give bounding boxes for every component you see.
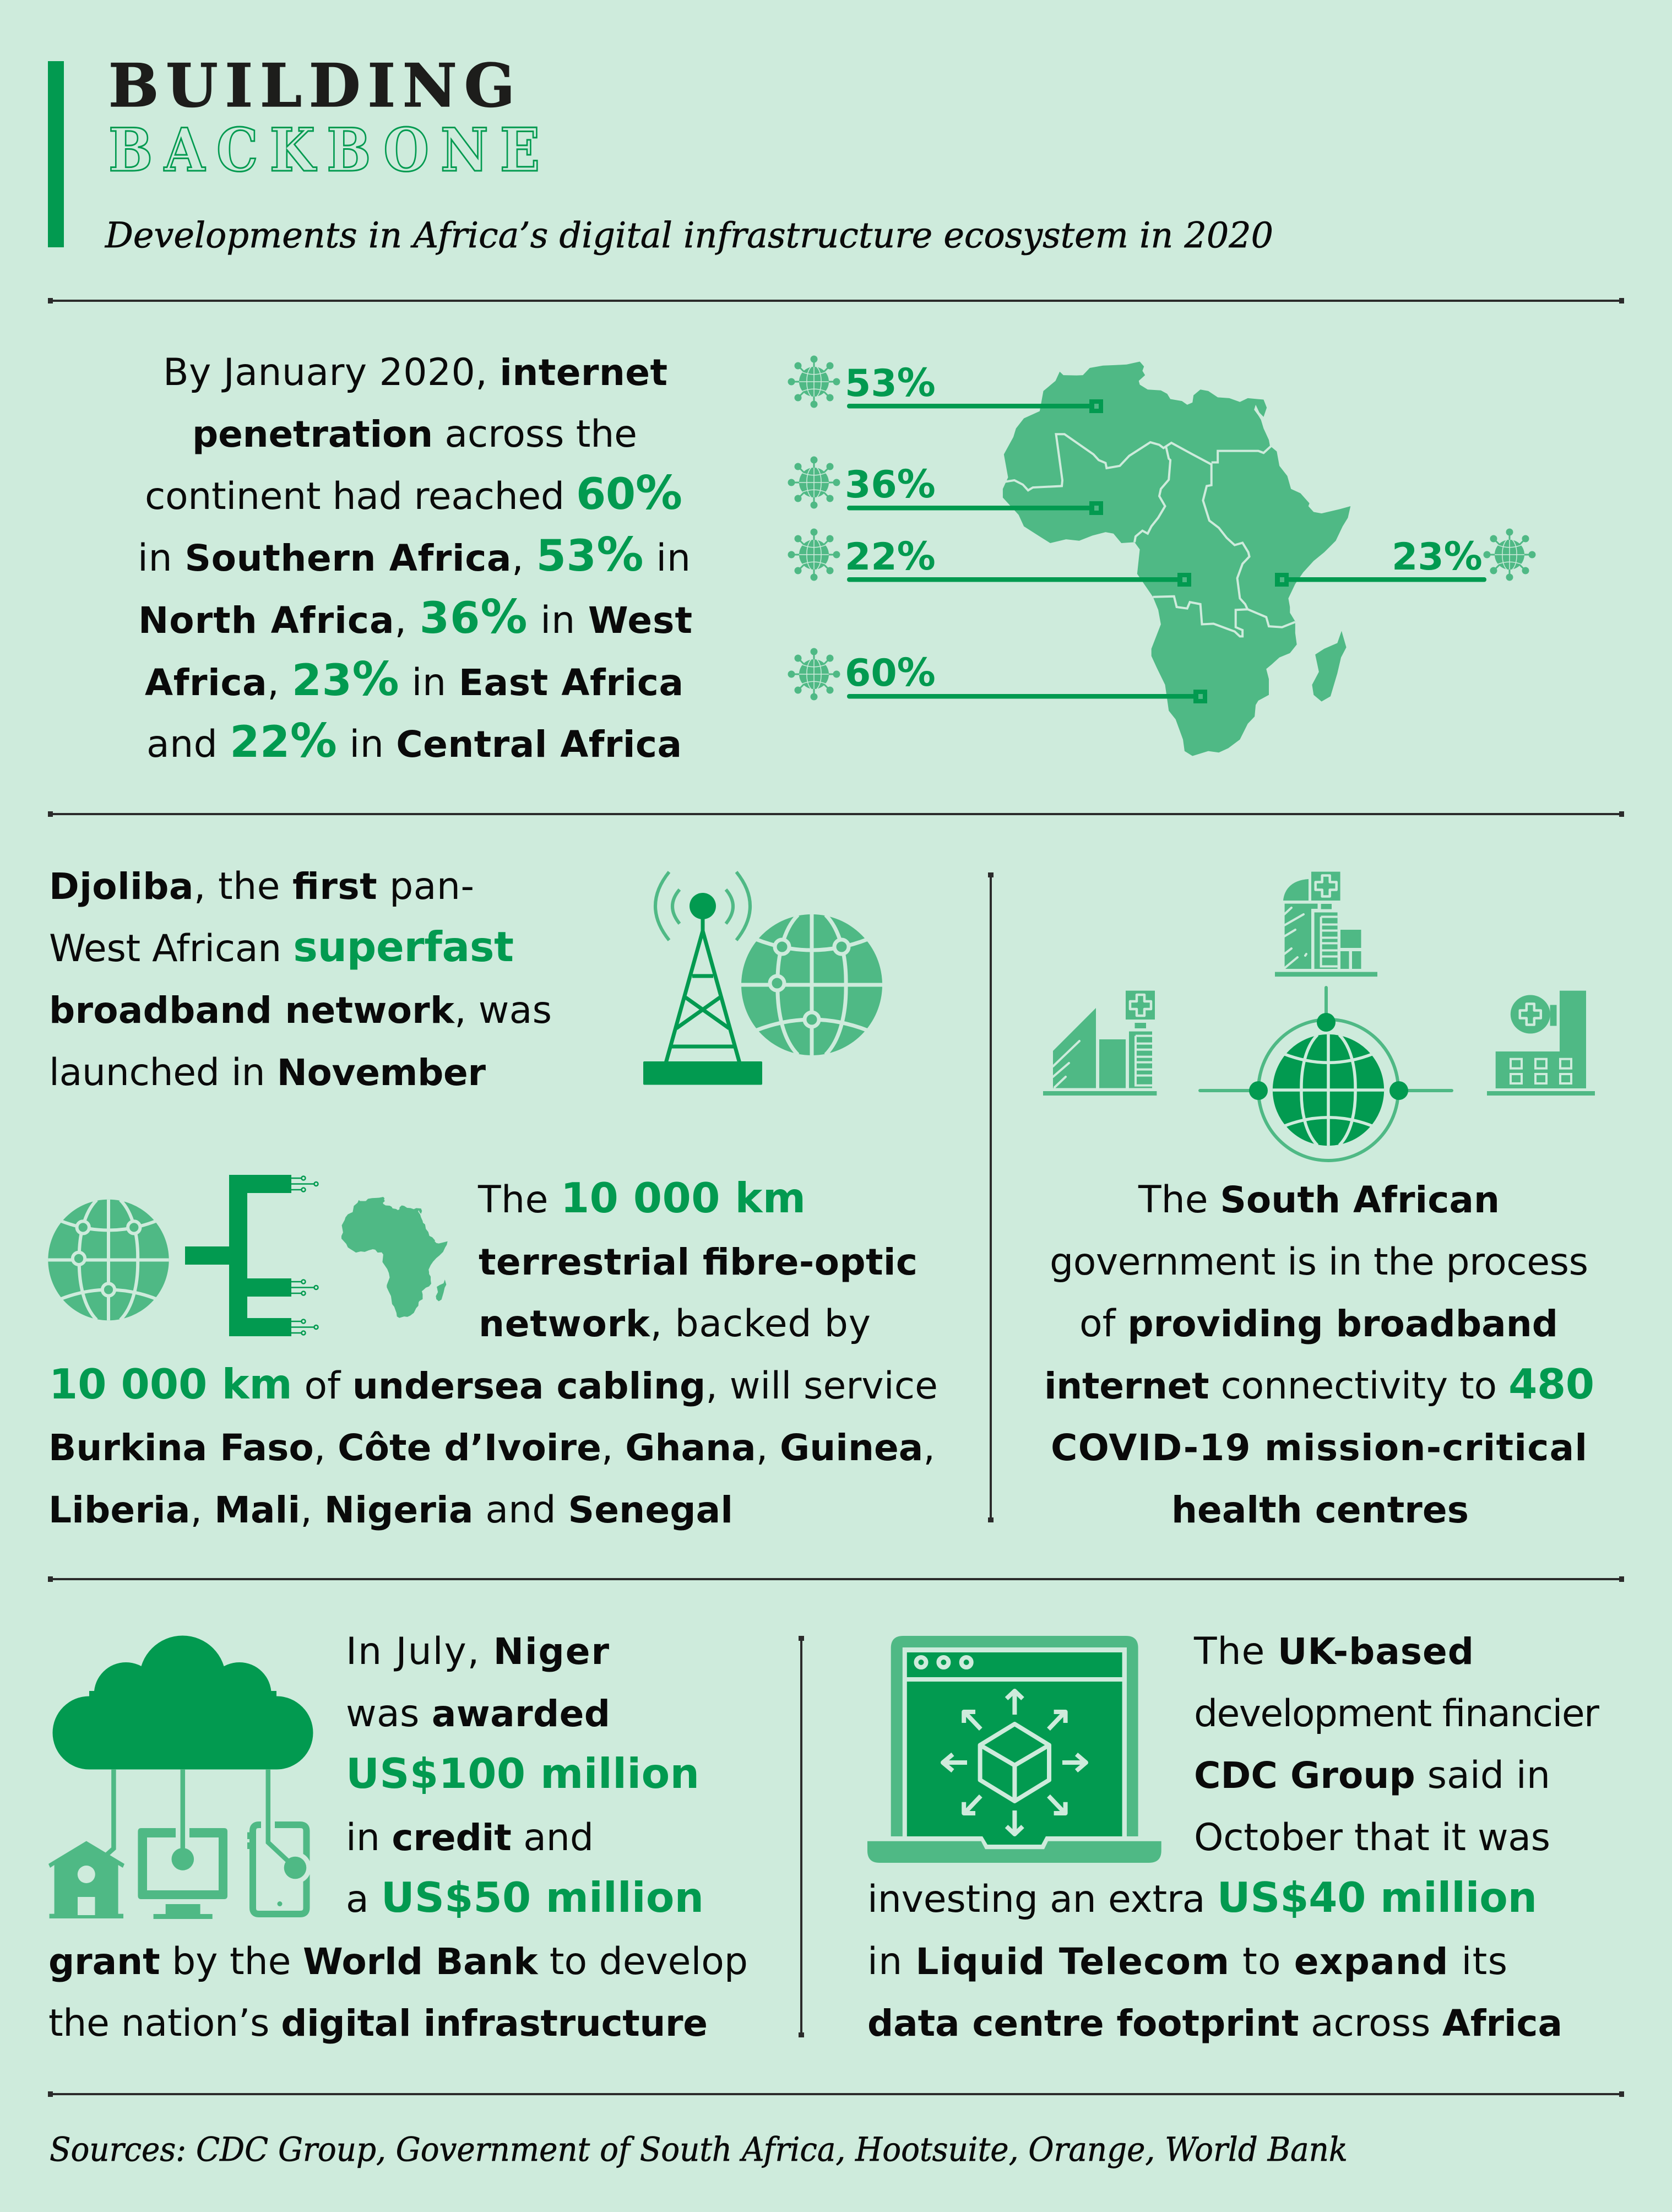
map: continent — [1003, 361, 1350, 756]
title: BUILDING — [108, 51, 515, 121]
icon: laptop with data centre cube — [867, 1636, 1161, 1863]
icon: top hospital — [1275, 872, 1377, 977]
icon: fibre-optic network diagram — [48, 1175, 448, 1336]
text: Djoliba: launched in November — [49, 1051, 486, 1094]
text: South African government: government is in the process — [1050, 1240, 1588, 1284]
laptop lid — [891, 1636, 1138, 1836]
icon: monitor — [138, 1828, 227, 1919]
text: Niger: grant by the World Bank to develop — [48, 1940, 748, 1983]
title — [108, 51, 540, 185]
text: CDC Group: in Liquid Telecom to expand its — [867, 1940, 1507, 1983]
connector lines — [106, 1769, 306, 1879]
map: Africa with regional penetration — [789, 356, 1535, 756]
text: CDC Group: investing an extra US$40 million — [867, 1873, 1537, 1922]
text: internet penetration: penetration across the — [192, 413, 637, 456]
cube and arrows — [943, 1691, 1086, 1834]
icon: health centres around a globe — [1043, 872, 1595, 1161]
icon: left hospital — [1043, 991, 1157, 1096]
title accent bar — [48, 61, 64, 247]
text: fibre-optic network: Burkina Faso, Côte d’Ivoire, Ghana, Guinea, — [48, 1426, 935, 1470]
text: Niger — [48, 1630, 748, 2045]
icon: cloud connecting devices — [48, 1636, 313, 1919]
text: CDC Group — [867, 1630, 1599, 2045]
text: Djoliba: Djoliba, the first pan- — [49, 865, 474, 908]
leader lines — [847, 399, 1486, 703]
text: South African government: health centres — [1171, 1489, 1469, 1531]
text: fibre-optic network: 10 000 km of undersea cabling, will service — [49, 1360, 938, 1408]
icon: globe with nodes — [741, 914, 882, 1055]
sources: Sources: CDC Group, Government of South Africa, Hootsuite, Orange, World Bank — [50, 2130, 1348, 2169]
text: Niger: the nation’s digital infrastructure — [48, 2002, 708, 2045]
icon: cable branches — [185, 1175, 318, 1336]
percent labels: 53% — [845, 360, 936, 405]
text: internet penetration: By January 2020, internet — [163, 351, 667, 394]
text: internet penetration: continent had reached 60% — [145, 466, 682, 521]
text: internet penetration — [138, 351, 692, 768]
text: Niger: in credit and — [346, 1816, 594, 1859]
icon: cloud — [53, 1636, 313, 1769]
text: Niger: US$100 million — [346, 1749, 699, 1798]
icon: right hospital — [1487, 991, 1595, 1096]
percent labels: 22% — [845, 534, 936, 579]
text: Niger: In July, Niger — [346, 1630, 609, 1673]
text: internet penetration: North Africa, 36% in West — [138, 590, 692, 644]
percent labels: 60% — [845, 650, 936, 695]
percent labels: 36% — [845, 462, 936, 507]
icons: small globes — [789, 356, 1535, 700]
text: Djoliba — [49, 865, 552, 1094]
text: CDC Group: data centre footprint across Africa — [867, 2002, 1562, 2045]
text: Djoliba: West African superfast — [49, 923, 514, 971]
icon: house — [48, 1841, 124, 1918]
text: Djoliba: broadband network, was — [49, 989, 552, 1032]
text: CDC Group: CDC Group said in — [1194, 1754, 1550, 1797]
window dots — [916, 1657, 971, 1667]
title: BACKBONE — [108, 115, 540, 185]
text: fibre-optic network: terrestrial fibre-optic — [479, 1241, 918, 1283]
text: CDC Group: The UK-based — [1193, 1630, 1474, 1673]
text: South African government: internet connectivity to 480 — [1044, 1360, 1594, 1408]
text: fibre-optic network — [48, 1174, 938, 1532]
text: South African government: The South African — [1138, 1178, 1500, 1222]
text: South African government: of providing broadband — [1079, 1302, 1558, 1346]
text: South African government — [1044, 1178, 1594, 1531]
text: fibre-optic network: network, backed by — [479, 1302, 871, 1346]
text: Niger: a US$50 million — [346, 1873, 704, 1922]
text: internet penetration: Africa, 23% in East Africa — [145, 652, 683, 707]
screen — [907, 1652, 1122, 1845]
icon: radio tower — [643, 872, 762, 1085]
text: CDC Group: October that it was — [1194, 1816, 1550, 1859]
text: fibre-optic network: Liberia, Mali, Nigeria and Senegal — [48, 1488, 733, 1532]
text: internet penetration: in Southern Africa, 53% in — [138, 528, 691, 582]
icon: globe — [48, 1200, 169, 1320]
text: fibre-optic network: The 10 000 km — [477, 1174, 806, 1222]
text: South African government: COVID-19 mission-critical — [1051, 1427, 1587, 1469]
percent labels — [845, 360, 1483, 695]
text: internet penetration: and 22% in Central Africa — [146, 714, 682, 768]
text: CDC Group: development financier — [1194, 1692, 1599, 1736]
laptop base — [867, 1841, 1161, 1863]
text: Niger: was awarded — [346, 1692, 610, 1736]
icon: phone — [247, 1825, 311, 1914]
subtitle: Developments in Africa’s digital infrastructure ecosystem in 2020 — [105, 215, 1273, 256]
icon: Africa — [341, 1197, 448, 1318]
percent labels: 23% — [1392, 534, 1483, 579]
divider rules — [48, 298, 1624, 2097]
icon: central globe — [1200, 988, 1452, 1161]
